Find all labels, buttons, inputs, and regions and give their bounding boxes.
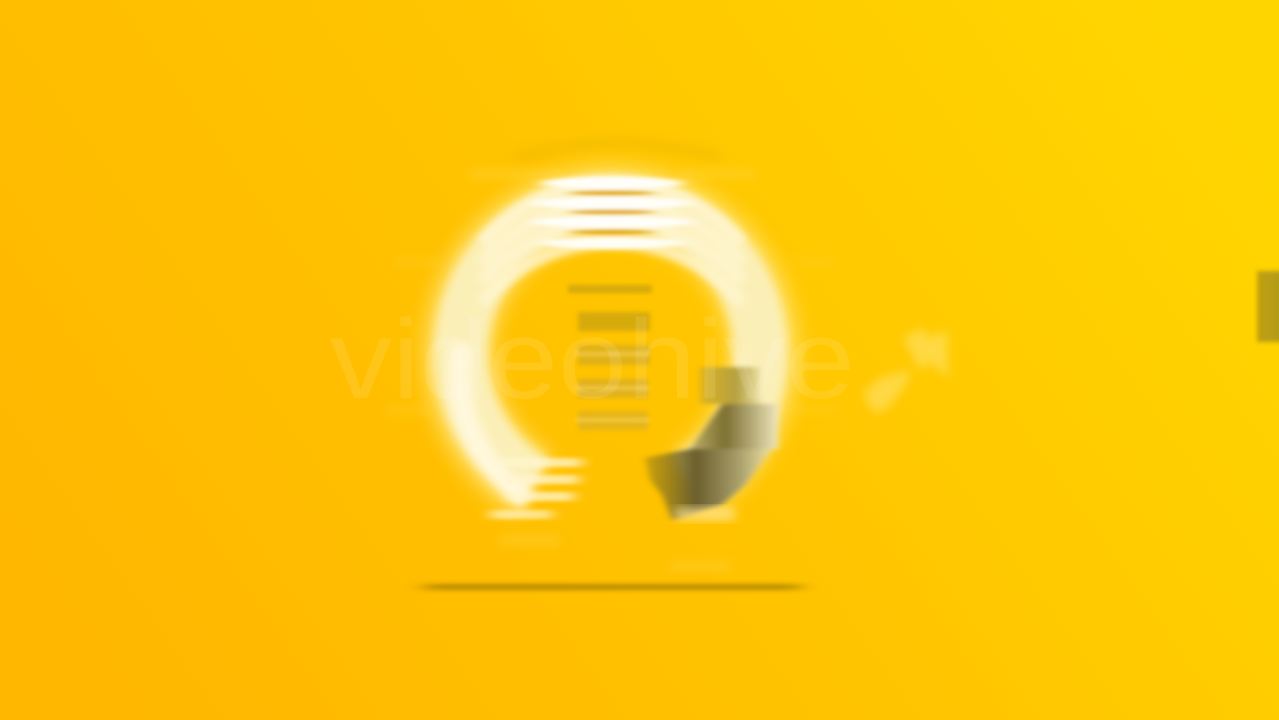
watermark text: videohive [330,297,855,422]
white ring glow [459,201,763,485]
faint outer halo ring [385,143,840,566]
white ring [459,203,761,500]
centre stacked bars [568,285,652,430]
partial element at right edge [1257,271,1279,342]
ground shadow [425,584,800,590]
dark shaded stepped ring end [645,367,778,520]
ring left end streaks [490,458,582,519]
ring top highlight bands [532,177,692,249]
ring right end highlight [675,508,735,520]
watermark arrow icon [864,328,948,414]
offset ring copies at shoulders [482,183,742,303]
